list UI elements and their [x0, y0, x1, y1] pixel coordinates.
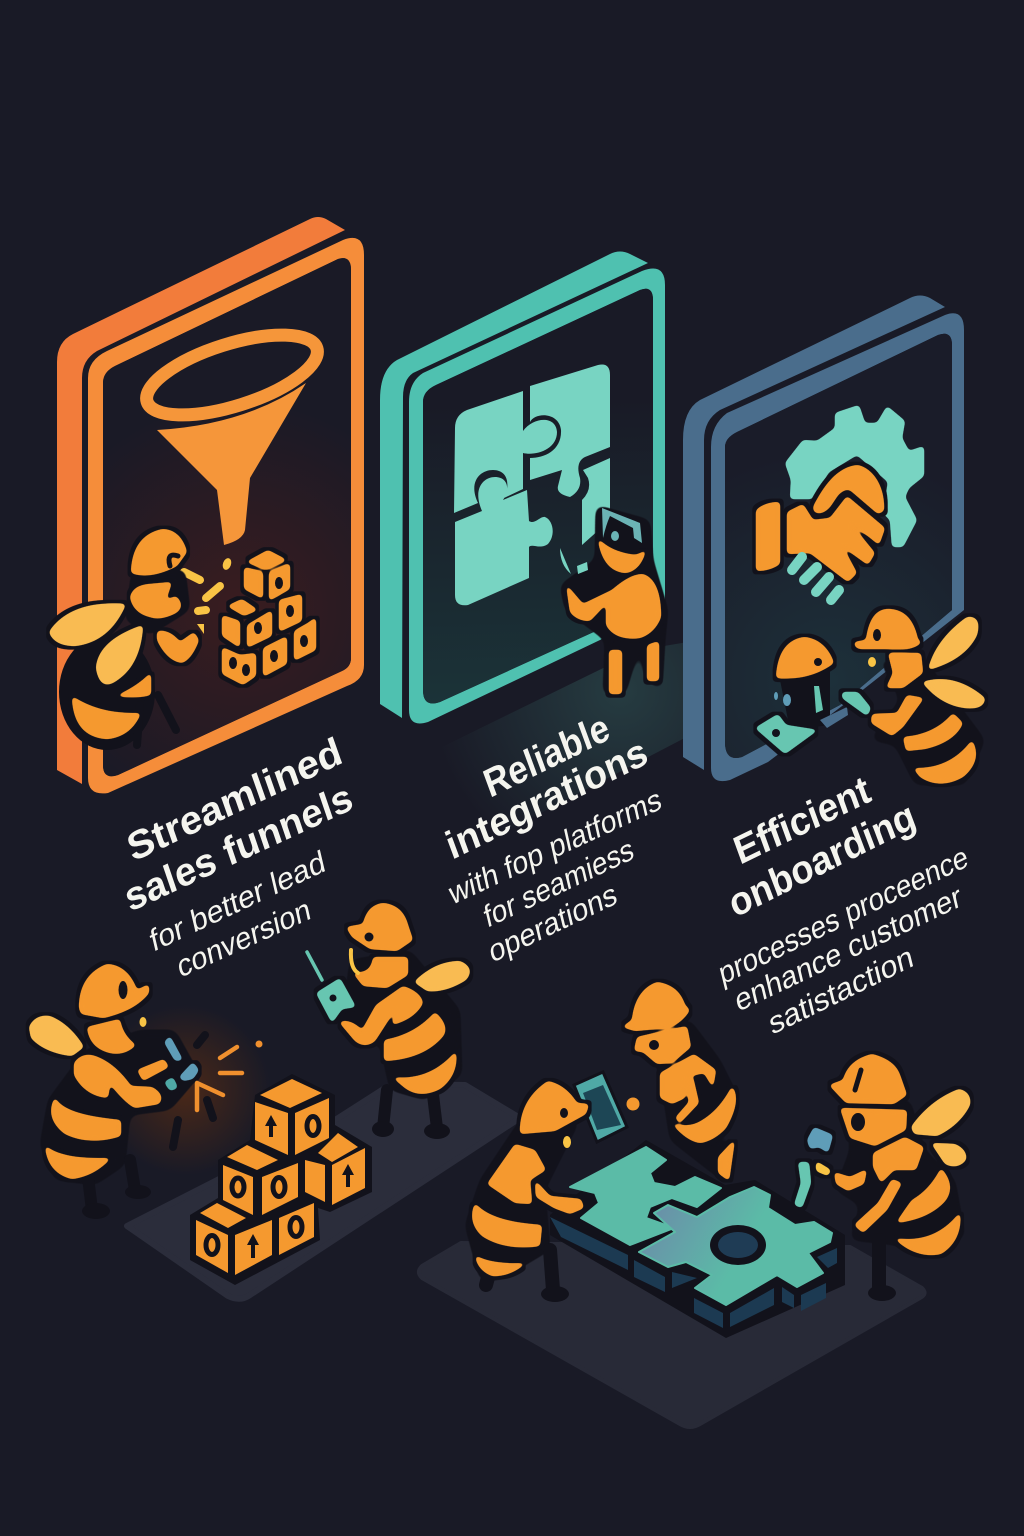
helper hat and laptop: [755, 637, 834, 754]
zeros on cubes: [206, 1116, 319, 1254]
panel inner background: [423, 289, 653, 704]
panel back plate: teal: [380, 252, 648, 718]
puzzle 3D sides: [550, 1217, 837, 1328]
panel inner background: [725, 334, 952, 758]
panel: integrations: [380, 252, 668, 724]
teal fingers: [792, 557, 839, 600]
bee parts: [622, 982, 736, 1181]
sub text: platforms: operations: [486, 877, 620, 970]
device antenna: [307, 952, 322, 980]
puzzle piece right: [582, 458, 610, 545]
sub text: customer satisfaction: satistaction: [766, 940, 917, 1042]
sparks: [184, 557, 233, 634]
figure hat outline: [602, 508, 642, 543]
puzzle piece with gear hole: [639, 1187, 832, 1305]
bee foot: [82, 1203, 110, 1219]
hook beak: [351, 950, 358, 973]
sub text: lead conversion: conversion: [174, 892, 314, 985]
bee eye: [364, 932, 374, 942]
bee silhouette: [340, 950, 462, 1100]
heading: streamlined sales funnels: sales funnels: [119, 776, 358, 921]
panel back plate: blue: [683, 296, 945, 770]
bee beak: [140, 1017, 146, 1027]
bee beak: [563, 1136, 571, 1148]
bee eye: [649, 1040, 659, 1050]
figure silhouette: [560, 505, 668, 695]
bee legs: [88, 1160, 135, 1210]
bee feet: [125, 1185, 151, 1199]
sub text: platforms: [445, 782, 664, 970]
puzzle piece top left: [454, 391, 557, 513]
sub text: customer satisfaction: enhance customer: [732, 880, 965, 1019]
cube holes: [229, 577, 308, 676]
panel front frame: orange: [88, 238, 364, 793]
figure eye: [611, 531, 619, 541]
puzzle piece bottom left: [455, 477, 553, 605]
gear: [785, 405, 924, 547]
panel front frame: teal: [409, 268, 665, 724]
cube faces: [196, 1079, 365, 1275]
bee: middle worker: [622, 982, 740, 1185]
helper silhouette: [780, 670, 830, 730]
spark glow: [100, 1005, 270, 1175]
bee: left worker with tool: [29, 964, 262, 1219]
bee foot: [868, 1285, 896, 1301]
helper eye and details: [814, 658, 822, 666]
bee silhouette: [870, 660, 985, 785]
bee silhouette: [640, 1020, 740, 1185]
heading: reliable integrations: [440, 706, 664, 970]
panel front frame: blue: [711, 313, 964, 781]
panel inner background: [103, 258, 351, 776]
bee face marks: [169, 555, 178, 566]
bee silhouette: [835, 1100, 965, 1260]
bee parts: [49, 529, 199, 739]
bee eye and beak: [873, 629, 881, 641]
bee eye: [560, 1108, 568, 1118]
gear hole: [710, 1225, 766, 1265]
icon: funnel: [138, 319, 326, 545]
bee parts: [29, 964, 199, 1179]
hat slit: [855, 1070, 861, 1090]
bee foot: [541, 1286, 569, 1302]
panel back plate: orange: [57, 217, 345, 784]
heading: streamlined sales funnels: Streamlined: [122, 730, 348, 871]
sub text: lead conversion: for better lead: [147, 845, 328, 959]
bee feet: [372, 1121, 394, 1137]
puzzle silhouette: [550, 1140, 845, 1338]
bee silhouette: [40, 1030, 200, 1185]
bee body silhouette: [59, 634, 155, 750]
bee: crouching left worker with tablet: [465, 1072, 640, 1302]
heading: reliable integrations: integrations: [440, 730, 653, 868]
funnel cone: [157, 383, 306, 545]
bee: worker with handset: [307, 903, 470, 1139]
orange dot: [626, 1098, 640, 1110]
bee head silhouette: [125, 570, 190, 635]
figure with tool: [560, 505, 668, 695]
main bee with hat and wings: [842, 609, 985, 785]
heading: efficient onboarding: [716, 768, 971, 1042]
floor platform: left: [127, 1085, 520, 1299]
icon: puzzle: [454, 364, 610, 605]
teal floor glow: [395, 640, 700, 850]
panel: sales funnel: [49, 217, 364, 793]
bee tablet: [574, 1072, 627, 1142]
bee legs: [486, 1250, 553, 1290]
large cube stack: [190, 1074, 372, 1285]
sparks: [173, 1035, 262, 1147]
heading: reliable integrations: Reliable: [478, 706, 615, 806]
bee leg: [872, 1240, 886, 1290]
bee foot: [424, 1123, 450, 1139]
icon: gear and handshake: [756, 405, 924, 600]
heading: efficient onboarding: onboarding: [723, 794, 921, 926]
bee eye: [851, 1113, 865, 1131]
figure parts: [566, 538, 661, 694]
funnel rim: [138, 319, 326, 431]
large puzzle assembly: [550, 1140, 845, 1338]
bee eye: [118, 981, 128, 999]
stack silhouette: [190, 1074, 372, 1285]
heading: streamlined sales funnels: [119, 730, 358, 985]
bee: right worker with hammer: [794, 1054, 970, 1301]
sub text: customer satisfaction: processes proceence: [716, 840, 971, 992]
handshake hands: [756, 465, 885, 582]
bee parts: [842, 609, 985, 784]
puzzle piece top right: [530, 364, 610, 497]
sub text: platforms: for seamiess: [481, 832, 637, 935]
puzzle piece left: [570, 1147, 721, 1245]
bee legs: [383, 1090, 437, 1128]
device hole: [330, 994, 336, 1002]
arrows on cubes: [247, 1115, 354, 1258]
panel: onboarding: [683, 296, 985, 785]
small helper bee with laptop: [755, 637, 848, 754]
bee parts: [316, 903, 470, 1094]
sub text: platforms: with fop platforms: [445, 782, 664, 912]
bee parts: [794, 1054, 970, 1255]
gear hole inner: [718, 1232, 758, 1258]
bee worker with hat and wings: [49, 529, 199, 750]
figure tool: [560, 548, 588, 574]
bee silhouette: [465, 1120, 580, 1280]
icon: small data cubes: [222, 550, 316, 685]
bee parts: [472, 1081, 589, 1276]
floor platform: right: [419, 1243, 925, 1427]
plate fragment: [820, 707, 848, 728]
heading: efficient onboarding: Efficient: [728, 768, 876, 873]
